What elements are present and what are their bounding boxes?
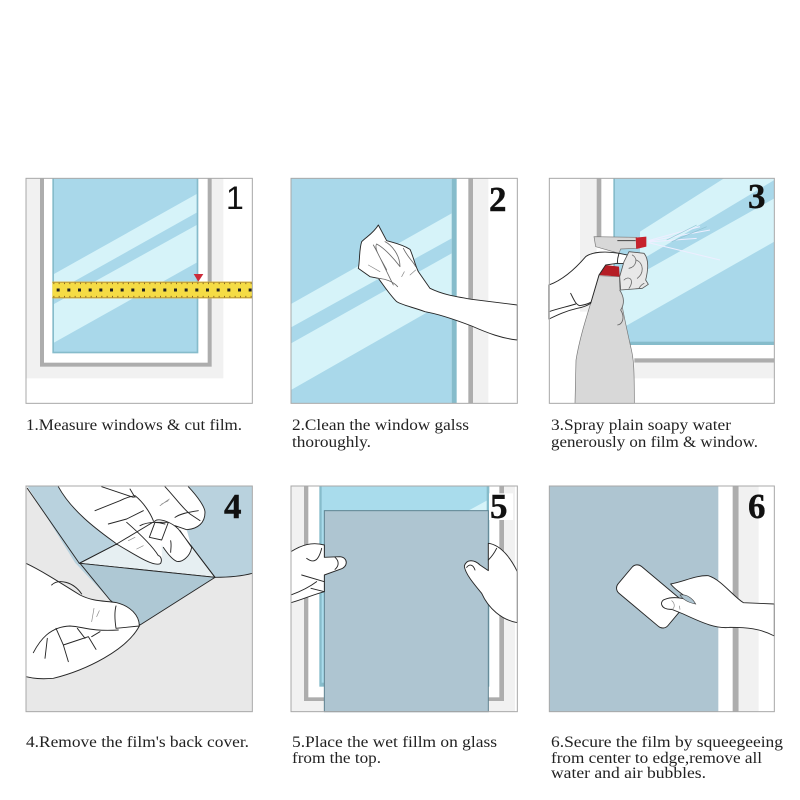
caption 6: from center to edge,remove all bbox=[551, 750, 763, 767]
caption 3: 3.Spray plain soapy water bbox=[551, 417, 732, 434]
caption 2: 2.Clean the window galss bbox=[292, 417, 469, 434]
caption 5 bbox=[292, 734, 497, 767]
step number 4: 4 bbox=[224, 487, 242, 526]
step number 3: 3 bbox=[748, 177, 766, 216]
step number 5: 5 bbox=[490, 487, 508, 526]
left hand bbox=[291, 544, 346, 603]
panel: step 2 clean glass bbox=[291, 178, 517, 451]
panel: step 1 measure window bbox=[26, 178, 252, 434]
upper hand bbox=[58, 486, 215, 577]
film triangle bbox=[80, 563, 215, 625]
caption 6: water and air bubbles. bbox=[551, 765, 706, 782]
caption 2: thoroughly. bbox=[292, 434, 371, 451]
caption 2 bbox=[292, 417, 469, 451]
panel: step 5 place film bbox=[291, 486, 517, 767]
caption 5: from the top. bbox=[292, 750, 381, 767]
caption 6: 6.Secure the film by squeegeeing bbox=[551, 734, 783, 751]
peeled back cover bbox=[79, 520, 215, 577]
measuring tape bbox=[52, 274, 252, 298]
spray bottle bbox=[575, 237, 646, 403]
hand with cloth bbox=[358, 225, 517, 340]
panel: step 6 squeegee bbox=[549, 486, 783, 782]
caption 4: 4.Remove the film's back cover. bbox=[26, 734, 249, 751]
squeegee bbox=[614, 562, 686, 631]
step number 6: 6 bbox=[748, 487, 766, 526]
step number 1: 1 bbox=[226, 180, 244, 216]
panel: step 4 remove back cover bbox=[26, 486, 252, 751]
caption 5: 5.Place the wet fillm on glass bbox=[292, 734, 497, 751]
caption 3: generously on film & window. bbox=[551, 434, 758, 451]
lower hand bbox=[26, 563, 139, 679]
panel: step 3 spray water bbox=[549, 177, 774, 451]
right hand bbox=[464, 543, 517, 623]
caption 6 bbox=[551, 734, 783, 782]
caption 3 bbox=[551, 417, 758, 451]
step number 2: 2 bbox=[489, 180, 506, 219]
hand on squeegee bbox=[662, 576, 774, 636]
caption 1: 1.Measure windows & cut film. bbox=[26, 417, 242, 434]
hand holding bottle bbox=[549, 252, 648, 319]
film sheet bbox=[324, 511, 488, 712]
